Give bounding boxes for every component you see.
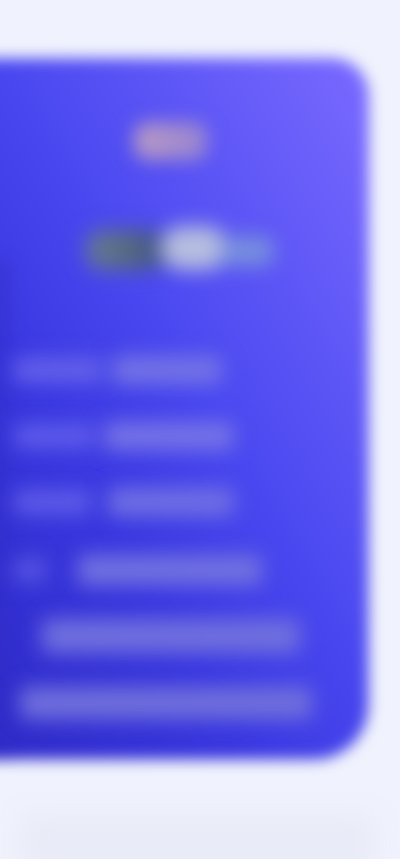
text row 2 [8,412,241,460]
text row 6 [20,687,312,719]
text row 5 [42,619,300,653]
row 3 value [108,488,234,516]
text row 1 [8,347,228,394]
left edge shade [0,260,10,750]
badge [134,122,208,160]
image strip [74,212,282,284]
image strip: blue segment [220,236,274,266]
image strip: light segment [160,226,228,270]
footer band [20,815,375,859]
panel: gradient card [0,59,368,759]
text row 4 [9,544,270,596]
row 3 label [14,490,92,514]
text row 3 [8,478,240,526]
row 4 label [14,558,46,582]
row 2 label [14,424,96,448]
row 2 value [104,422,234,450]
row 4 value [78,555,262,585]
image strip: dark segment [86,230,166,270]
row 1 value [112,356,222,384]
row 1 label [14,358,104,382]
